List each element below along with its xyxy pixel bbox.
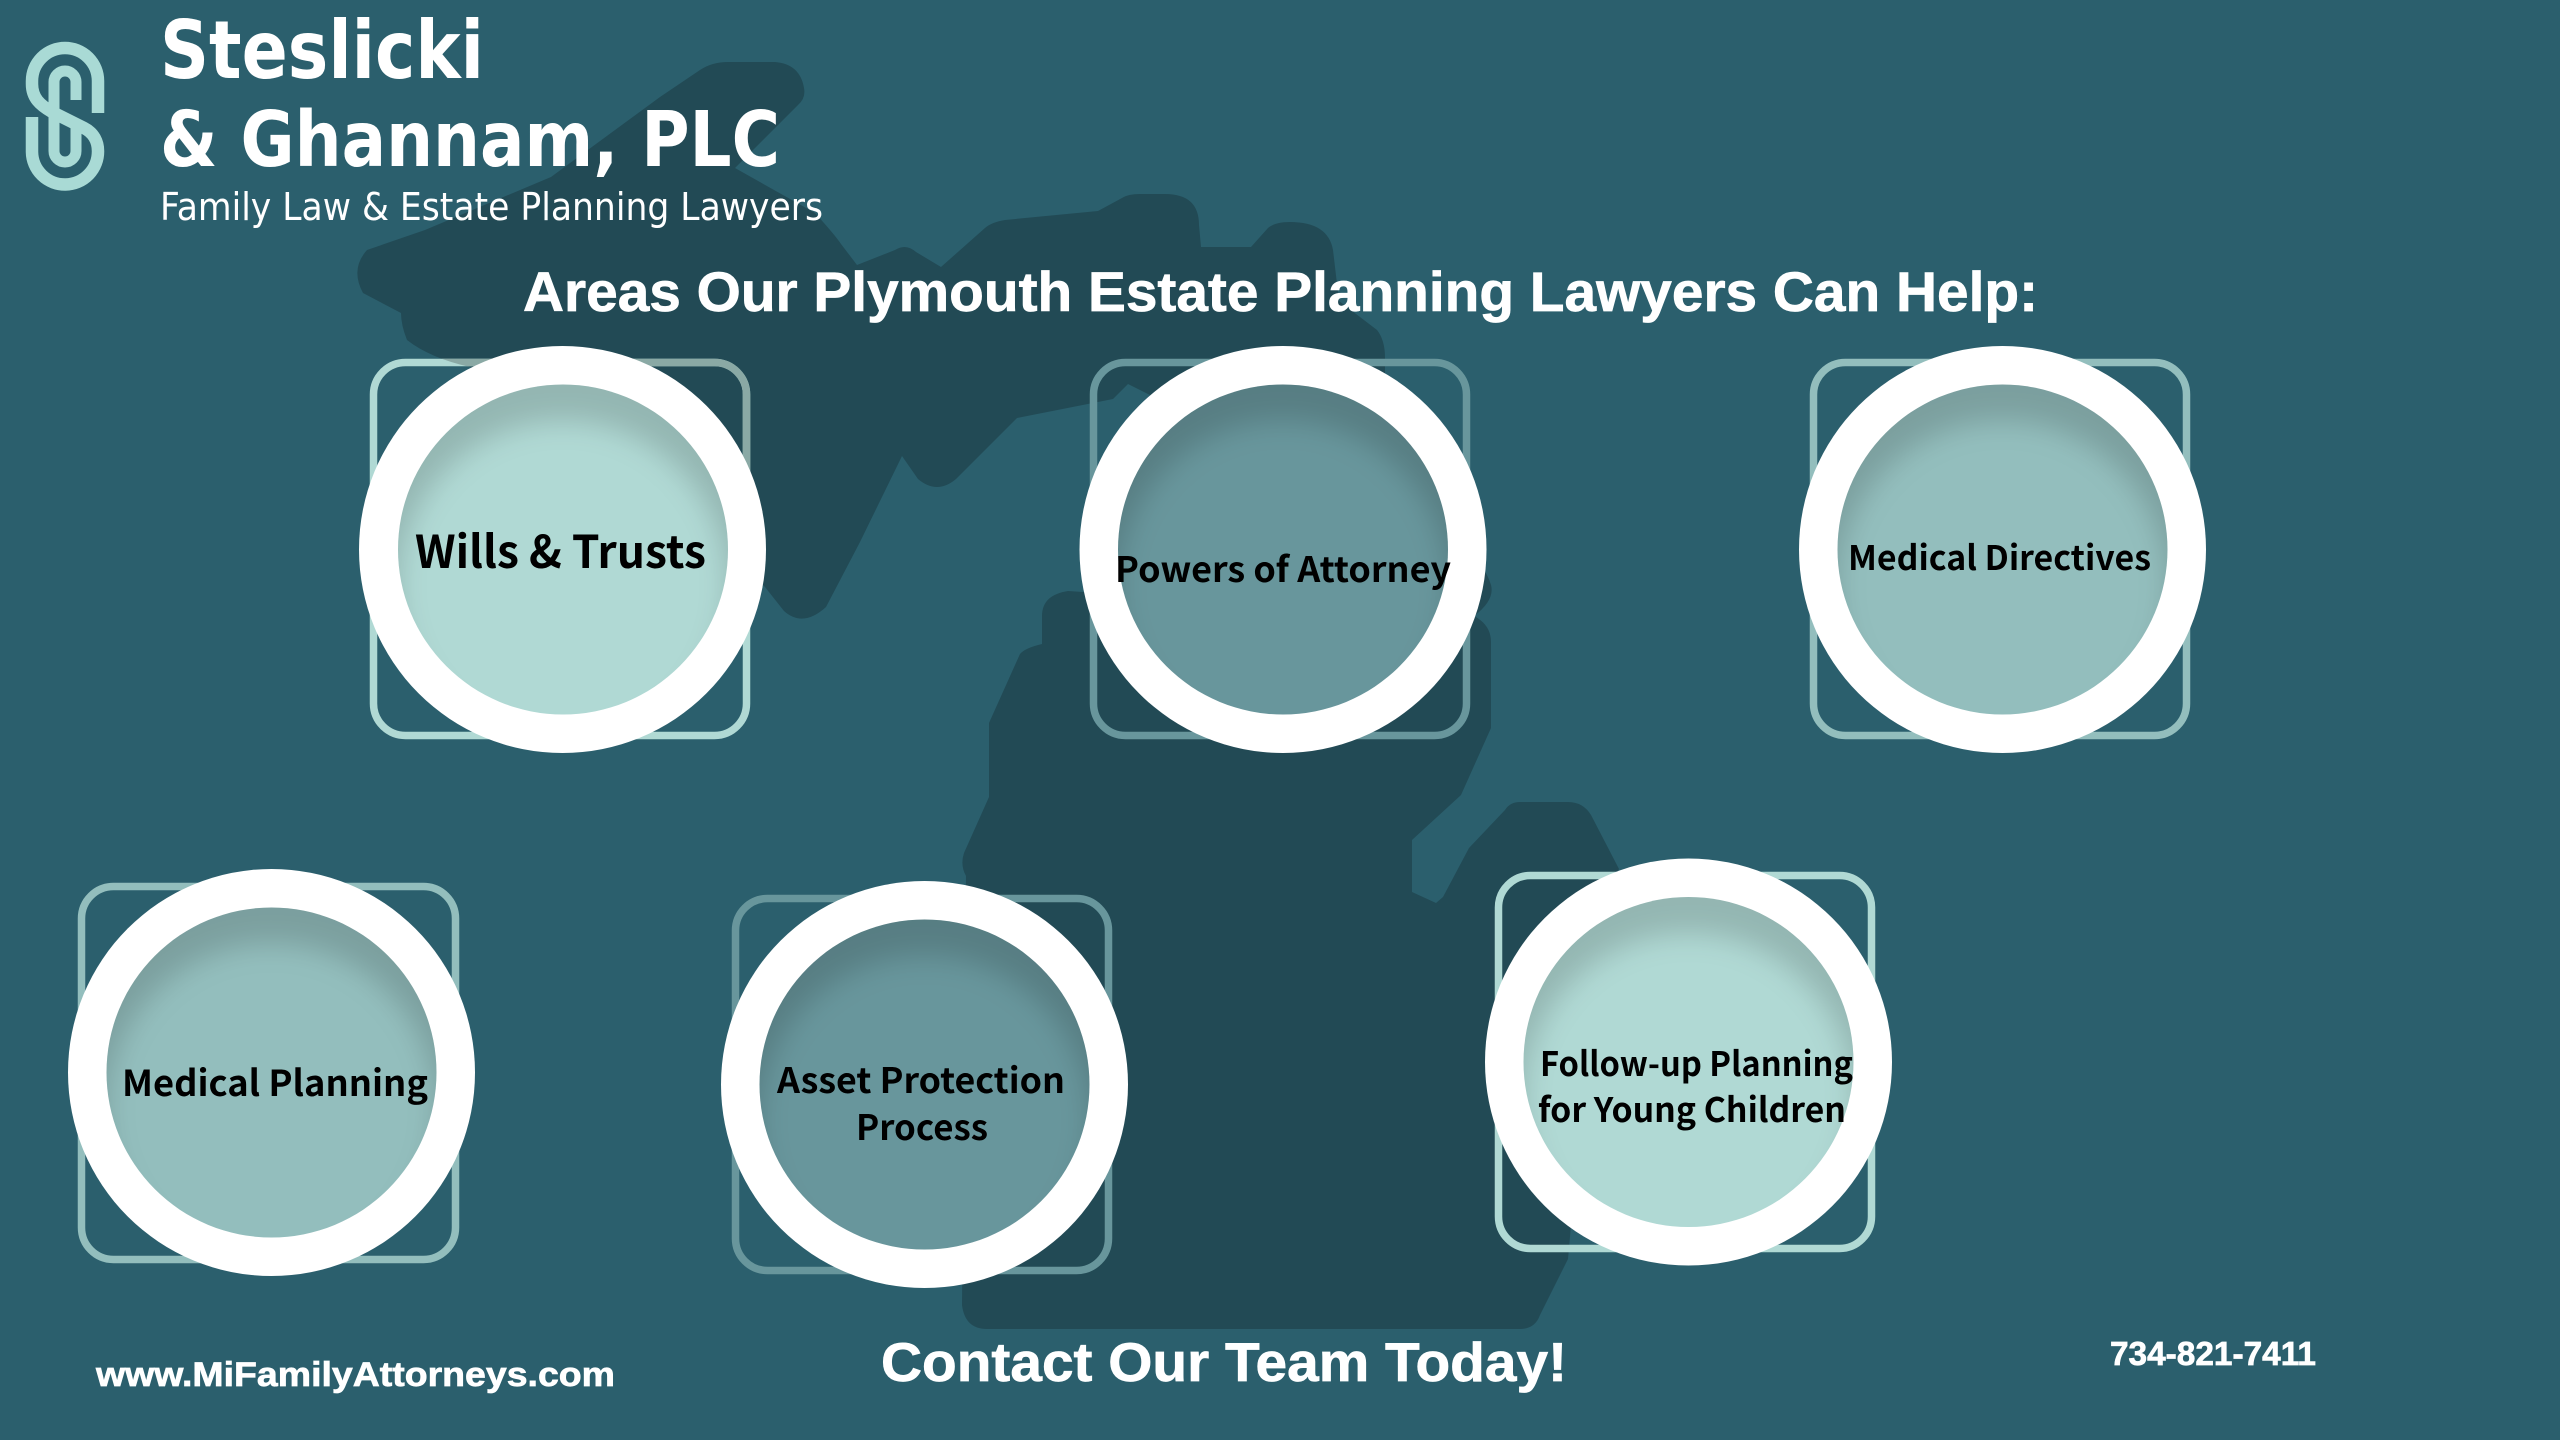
service card: Follow-up Planning for Young Children — [1485, 858, 1892, 1266]
service card: Powers of Attorney: Powers of Attorney — [1115, 542, 1451, 593]
service card: Medical Planning: Medical Planning — [122, 1055, 428, 1107]
logo wordmark: & Ghannam, PLC — [160, 96, 780, 185]
logo wordmark — [160, 4, 823, 229]
logo wordmark: Family Law & Estate Planning Lawyers — [160, 185, 823, 229]
service card: Asset Protection Process: Process — [856, 1100, 988, 1151]
service card: Medical Planning — [68, 869, 475, 1276]
service card: Follow-up Planning for Young Children: Follow-up Planning — [1540, 1037, 1853, 1086]
phone number: 734-821-7411 — [2110, 1335, 2316, 1372]
service card: Asset Protection Process: Asset Protection — [776, 1053, 1065, 1104]
main heading: Areas Our Plymouth Estate Planning Lawyers Can Help: — [523, 260, 2038, 323]
lower peninsula — [962, 560, 1619, 1329]
service card: Wills & Trusts: Wills & Trusts — [415, 516, 706, 581]
upper peninsula — [357, 62, 1385, 619]
service card: Medical Directives: Medical Directives — [1848, 531, 2151, 580]
service card: Wills & Trusts — [359, 346, 766, 753]
service card: Powers of Attorney — [1080, 346, 1486, 753]
service card: Medical Directives — [1799, 346, 2206, 753]
service card: Follow-up Planning for Young Children: for Young Children — [1538, 1083, 1846, 1132]
Michigan map silhouette — [357, 62, 1619, 1329]
website address: www.MiFamilyAttorneys.com — [95, 1356, 615, 1394]
logo icon: interlinked S — [32, 48, 98, 184]
service card: Asset Protection Process — [721, 881, 1128, 1288]
logo wordmark: Steslicki — [160, 4, 484, 97]
call to action: Contact Our Team Today! — [881, 1331, 1567, 1393]
